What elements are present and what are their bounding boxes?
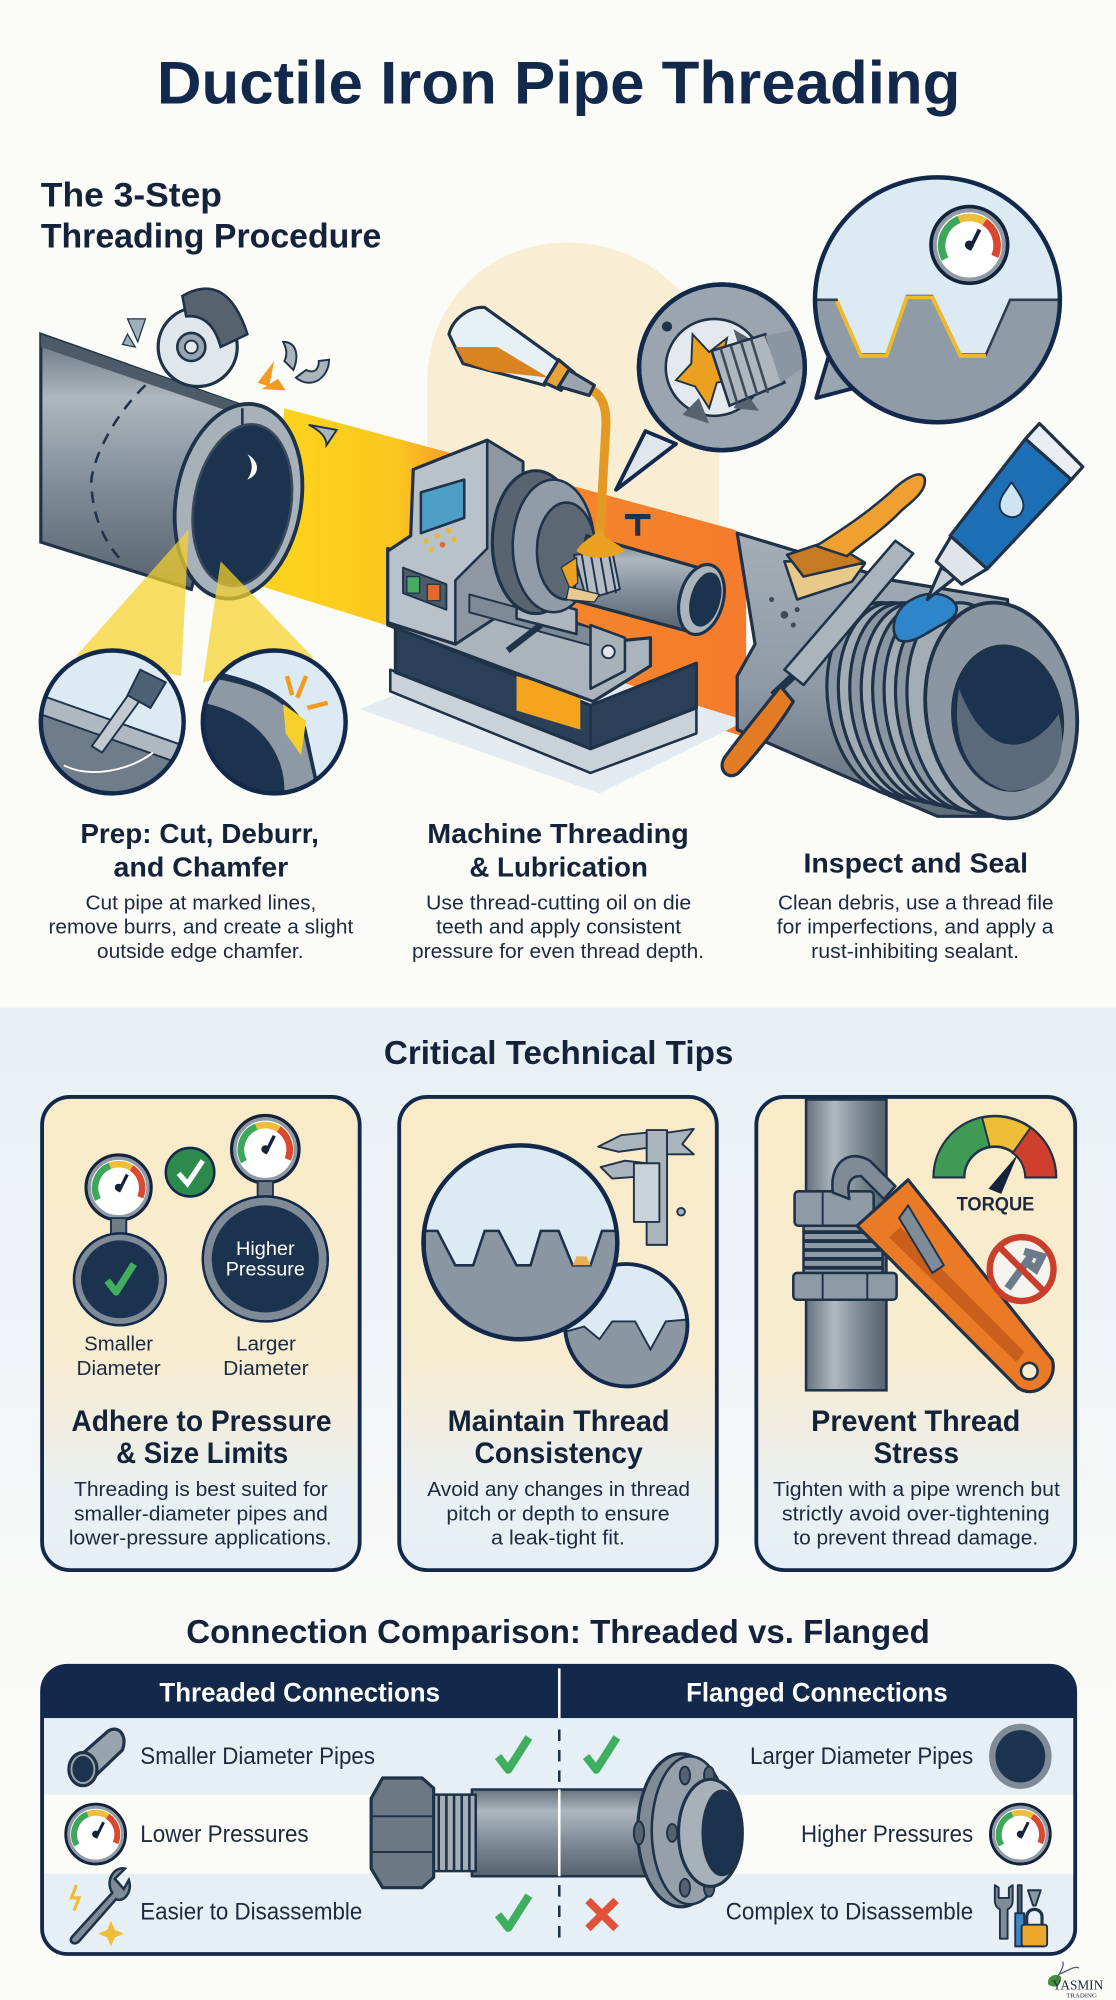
diameter labels: Smaller: [84, 1334, 153, 1356]
icon: cutting blade and chips: [122, 289, 337, 445]
panel: thread stress: Tighten with a pipe wrench but: [773, 1479, 1060, 1501]
row labels: Larger Diameter Pipes: [750, 1743, 973, 1769]
icon: vertical pipe with fittings: [793, 1099, 897, 1390]
step 3 text: [777, 847, 1054, 963]
icon: torque gauge: TORQUE: [957, 1193, 1034, 1215]
logo: Yasmin Trading: [1048, 1962, 1103, 1999]
icon: wrench with sparkles: [71, 1868, 130, 1946]
logo: Yasmin Trading: YASMIN: [1052, 1979, 1103, 1994]
panel: thread consistency: Avoid any changes in thread: [427, 1479, 690, 1501]
icon: caliper: [598, 1129, 694, 1245]
yellow to orange process band: [263, 408, 746, 737]
icon: small gauge and pipe: [74, 1155, 166, 1325]
panel: pressure and size limits: Threading is best suited for: [74, 1479, 328, 1501]
row labels: [140, 1743, 973, 1925]
row labels: Smaller Diameter Pipes: [140, 1743, 375, 1769]
panel: thread consistency: Maintain Thread: [448, 1405, 670, 1438]
panel: pressure and size limits: Adhere to Pressure: [71, 1405, 332, 1438]
panel: thread stress: [756, 1097, 1075, 1570]
row labels: Higher Pressures: [801, 1821, 973, 1847]
icon: oil bottle and stream: [449, 307, 625, 558]
procedure heading: The 3-Step: [41, 177, 222, 215]
step 1 text: outside edge chamfer.: [97, 941, 304, 963]
detail: deburring circle: [41, 651, 185, 804]
panel: thread stress: to prevent thread damage.: [793, 1528, 1038, 1550]
cream arch backdrop: [427, 242, 719, 600]
step 2 text: Use thread-cutting oil on die: [426, 892, 691, 914]
icon: large pipe ring: [992, 1727, 1048, 1786]
illustration: cut pipe: [41, 334, 317, 609]
check and cross marks: [498, 1737, 617, 1929]
step 2 text: teeth and apply consistent: [436, 917, 681, 939]
panel: thread stress: Prevent Thread: [811, 1405, 1020, 1438]
icon: pipe wrench: [832, 1156, 1053, 1392]
panel: thread consistency: pitch or depth to ensure: [446, 1503, 670, 1525]
tips heading: Critical Technical Tips: [384, 1035, 733, 1072]
step 2 text: [412, 818, 704, 963]
step 3 text: Inspect and Seal: [804, 847, 1028, 878]
illustration: threading machine: [360, 440, 746, 793]
logo: Yasmin Trading: TRADING: [1066, 1993, 1097, 1999]
icon: torque gauge: [934, 1116, 1056, 1215]
step 1 text: Prep: Cut, Deburr,: [80, 818, 319, 849]
row labels: Easier to Disassemble: [140, 1899, 362, 1925]
icon: high pressure gauge: [990, 1804, 1050, 1864]
diameter labels: Diameter: [77, 1358, 161, 1380]
step 3 text: Clean debris, use a thread file: [778, 892, 1054, 914]
step 2 text: & Lubrication: [469, 851, 648, 882]
comparison heading: Connection Comparison: Threaded vs. Flanged: [186, 1614, 930, 1651]
panel: pressure and size limits: & Size Limits: [116, 1437, 288, 1470]
icon: worn thread circle: [564, 1262, 690, 1388]
step 1 text: remove burrs, and create a slight: [48, 917, 354, 939]
panel: pressure and size limits: smaller-diameter pipes and: [74, 1503, 328, 1525]
step 3 text: rust-inhibiting sealant.: [811, 941, 1019, 963]
panel: thread stress: Stress: [874, 1437, 959, 1470]
icon: wire brush: [784, 474, 925, 600]
diameter labels: [77, 1334, 309, 1380]
step 2 text: Machine Threading: [427, 818, 689, 849]
panel: pressure and size limits: [42, 1097, 360, 1570]
icon: large gauge and pipe: Higher: [236, 1238, 295, 1260]
row labels: Complex to Disassemble: [726, 1899, 973, 1925]
header labels: Threaded Connections: [159, 1677, 440, 1707]
step 3 text: for imperfections, and apply a: [777, 917, 1054, 939]
comparison table: [42, 1666, 1075, 1955]
panel: pressure and size limits: lower-pressure applications.: [69, 1528, 332, 1550]
icon: large gauge and pipe: [203, 1116, 328, 1321]
icon: sealant tube: [894, 424, 1083, 641]
icon: small pipe: [69, 1729, 124, 1786]
callout: thread profile with gauge: [804, 177, 1071, 434]
step 1 text: [48, 818, 354, 963]
panel: thread stress: strictly avoid over-tightening: [782, 1503, 1050, 1525]
diameter labels: Diameter: [223, 1358, 309, 1380]
panel: thread consistency: Consistency: [474, 1437, 643, 1470]
procedure heading: [41, 177, 381, 255]
step 1 text: and Chamfer: [114, 851, 288, 882]
detail: chamfer circle: [203, 638, 351, 797]
yellow magnifier beams: [77, 529, 314, 682]
title: Ductile Iron Pipe Threading: [157, 49, 960, 116]
header labels: [159, 1677, 948, 1707]
icon: even thread circle: [423, 1145, 619, 1346]
icon: large gauge and pipe: Pressure: [226, 1258, 305, 1280]
icon: low pressure gauge: [66, 1804, 126, 1864]
illustration: threaded pipe: [737, 533, 1091, 828]
threaded vs flanged pipe illustration: [371, 1754, 742, 1907]
panel: thread consistency: a leak-tight fit.: [491, 1528, 625, 1550]
header labels: Flanged Connections: [686, 1677, 948, 1707]
icon: tools and padlock: [995, 1885, 1047, 1946]
callout: threading die: [616, 284, 805, 490]
procedure heading: Threading Procedure: [41, 217, 381, 255]
row labels: Lower Pressures: [140, 1821, 309, 1847]
diameter labels: Larger: [236, 1334, 296, 1356]
icon: no over-tightening sign: [990, 1237, 1054, 1301]
step 2 text: pressure for even thread depth.: [412, 941, 704, 963]
step 1 text: Cut pipe at marked lines,: [85, 892, 316, 914]
icon: thread file: [722, 541, 913, 776]
icon: check badge: [166, 1148, 214, 1196]
panel: thread consistency: [399, 1097, 717, 1570]
